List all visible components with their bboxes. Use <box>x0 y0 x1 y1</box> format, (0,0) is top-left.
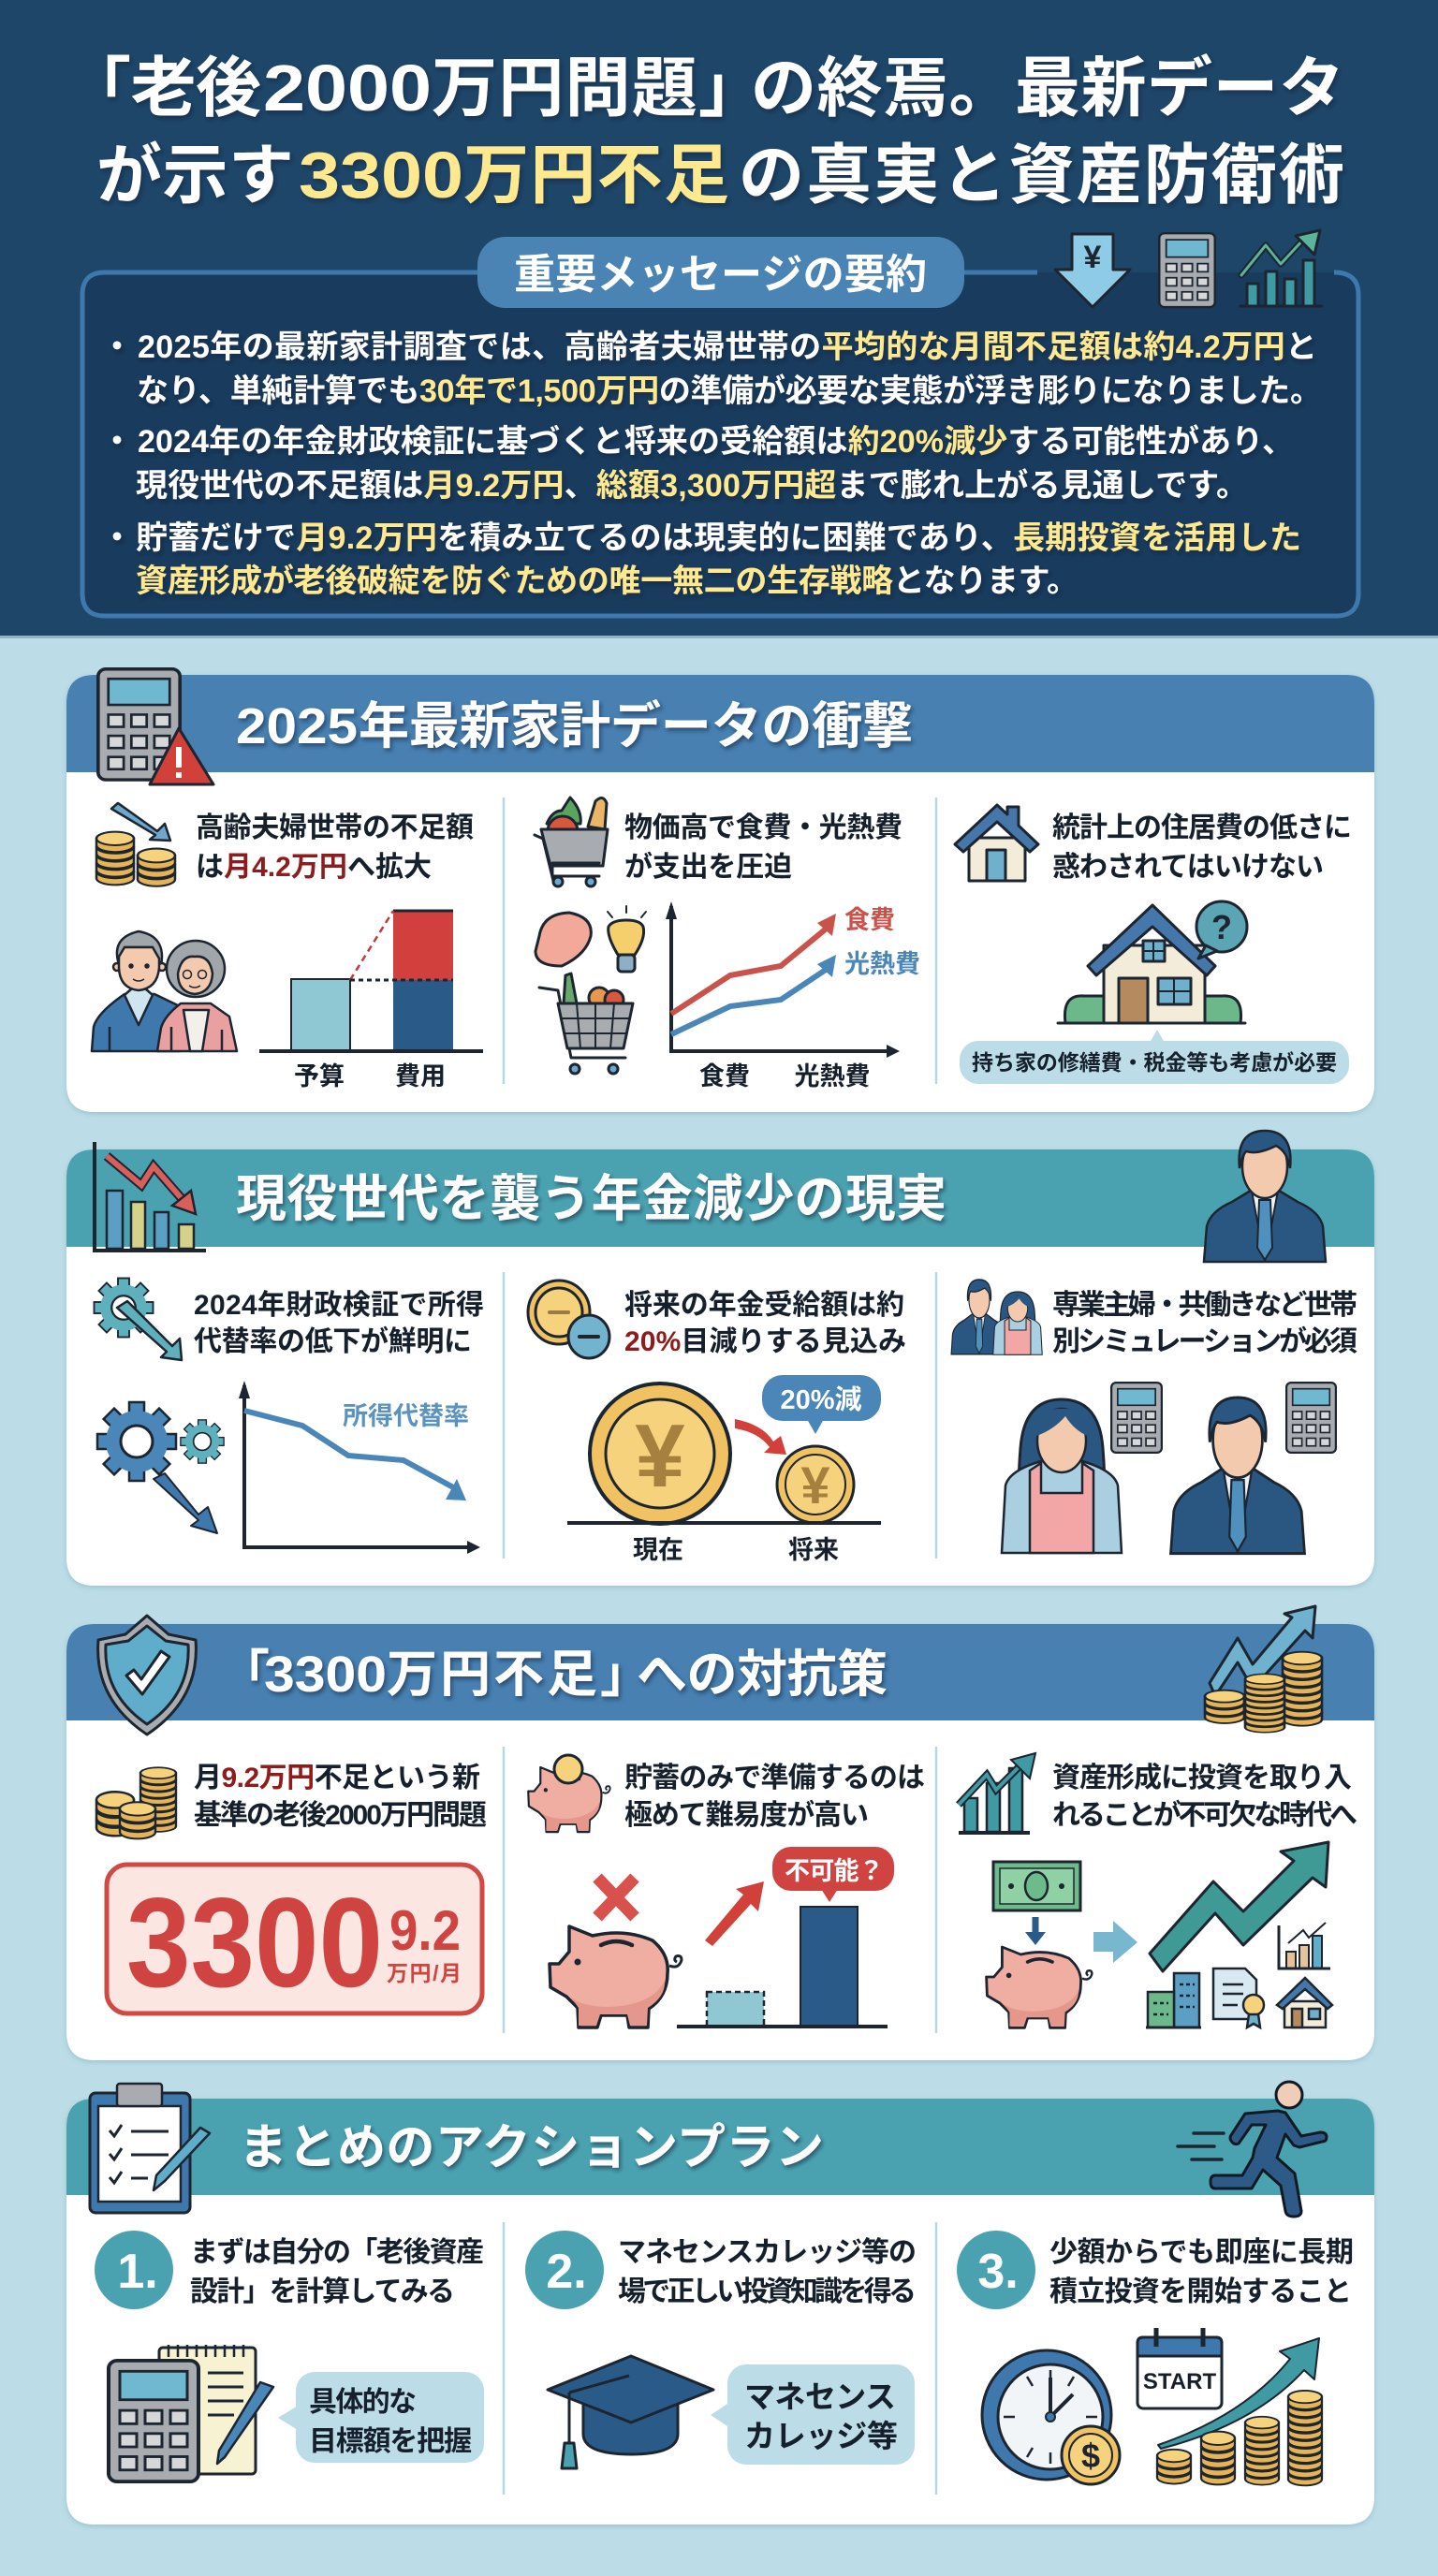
column: household simulation: 別シミュレーションが必須 <box>1052 1325 1357 1357</box>
icon: gears and down arrow <box>97 1402 224 1533</box>
column: savings difficulty: 極めて難易度が高い <box>624 1799 869 1831</box>
callout: 3300 figure: 9.2 <box>389 1899 461 1962</box>
column: investment <box>959 1753 1357 2027</box>
icon: housewife with calculator <box>1002 1383 1162 1553</box>
column: prices <box>535 798 920 1090</box>
icon: piggy with coin <box>528 1755 610 1832</box>
icon: meat <box>536 913 591 966</box>
text: まずは自分の「老後資産 <box>190 2237 484 2268</box>
line chart: food and utilities: 食費 <box>699 1062 750 1090</box>
header band <box>0 0 1438 638</box>
summary text: 資産形成が老後破綻を防ぐための唯一無二の生存戦略となります。 <box>136 563 1078 599</box>
arrow: up <box>705 1881 764 1946</box>
icon: falling bar chart <box>95 1142 206 1251</box>
line chart: food and utilities: 食費 <box>844 906 895 934</box>
callout: money sense college: カレッジ等 <box>744 2419 898 2453</box>
icon: shield <box>98 1616 196 1734</box>
icon: house <box>955 805 1038 881</box>
column: new standard <box>96 1763 487 2013</box>
callout: homeowner costs <box>960 1030 1349 1084</box>
icon: shopping cart <box>535 798 608 886</box>
heading: 現役世代を襲う年金減少の現実 <box>236 1171 946 1227</box>
icon: office worker with calculator <box>1170 1383 1336 1554</box>
icon: rising coin stacks <box>1157 2391 1322 2485</box>
text: 資産形成に投資を取り入 <box>1052 1763 1352 1793</box>
callout: 20% decrease <box>762 1375 881 1434</box>
column: 20% reduction <box>528 1281 906 1564</box>
arrow: reduction <box>735 1419 786 1455</box>
title: 万円不足 <box>463 139 729 212</box>
icon: start calendar: START <box>1143 2369 1216 2394</box>
column: housing <box>955 805 1352 1084</box>
callout: money sense college: マネセンス <box>744 2379 896 2414</box>
icon: start calendar <box>1137 2328 1222 2408</box>
callout: money sense college <box>711 2364 915 2465</box>
column: housing: 惑わされてはいけない <box>1052 852 1324 883</box>
column: step 2: 場で正しい投資知識を得る <box>618 2276 917 2307</box>
icon: cross <box>597 1878 635 1917</box>
column: replacement rate: 代替率の低下が鮮明に <box>194 1325 472 1357</box>
column: new standard: 基準の老後2000万円問題 <box>194 1800 487 1831</box>
icon: runner <box>1178 2082 1327 2217</box>
icon: businessman <box>1204 1131 1326 1262</box>
icon: growth chart <box>1240 230 1322 306</box>
arrow: growth <box>1150 1842 1328 1971</box>
icon: house with question: ? <box>1211 908 1232 946</box>
number badge 1 <box>95 2231 173 2309</box>
title: 「老後 <box>66 51 261 124</box>
line chart: replacement rate: 所得代替率 <box>343 1402 469 1430</box>
icon: growth chart <box>959 1753 1035 1833</box>
column: 20% reduction: 20%目減りする見込み <box>624 1326 906 1357</box>
heading: への対抗策 <box>637 1647 888 1703</box>
heading: 年最新家計データの衝撃 <box>359 698 913 754</box>
coins comparison: 現在 <box>633 1536 683 1564</box>
column: household simulation <box>951 1280 1357 1554</box>
summary text: なり、単純計算でも30年で1,500万円の準備が必要な実態が浮き彫りになりました。 <box>137 373 1322 409</box>
bar chart: budget vs expenses: 予算 <box>294 1062 345 1090</box>
line chart: food and utilities <box>666 901 920 1090</box>
arrow: growth curve <box>1158 2338 1319 2449</box>
icon: coin stacks <box>96 1767 176 1838</box>
panel header <box>66 1624 1374 1720</box>
column: step 2 <box>525 2231 917 2468</box>
icon: clock and coin <box>982 2350 1120 2484</box>
bar chart: budget vs expenses <box>259 911 483 1090</box>
column: step 3 <box>957 2231 1354 2485</box>
callout: 3300 figure: 3300 <box>126 1871 383 2013</box>
column: savings difficulty <box>528 1755 925 2027</box>
summary text: 2025年の最新家計調査では、高齢者夫婦世帯の平均的な月間不足額は約4.2万円と <box>138 329 1317 365</box>
callout: homeowner costs: 持ち家の修繕費・税金等も考慮が必要 <box>972 1050 1337 1075</box>
panel: 2025 household data <box>66 669 1374 1112</box>
line chart: food and utilities: 光熱費 <box>844 950 920 978</box>
line chart: replacement rate <box>239 1381 480 1554</box>
arrow: to growth <box>1093 1921 1137 1963</box>
title: 3300 <box>299 139 463 212</box>
summary text: ・ <box>101 520 133 556</box>
summary text: ・ <box>101 424 133 460</box>
icon: clipboard checklist <box>90 2084 210 2213</box>
icon: elderly couple <box>92 931 237 1051</box>
number badge 2 <box>525 2231 604 2309</box>
callout: impossible: 不可能？ <box>785 1857 884 1885</box>
icon: yen down arrow <box>1055 234 1130 307</box>
coins comparison <box>567 1375 881 1564</box>
icon: coin and minus <box>528 1281 609 1358</box>
heading: 「 <box>219 1647 270 1703</box>
icon: yen down arrow: ¥ <box>1084 240 1102 275</box>
heading <box>219 1647 888 1703</box>
coins comparison: 将来 <box>788 1536 839 1564</box>
icon: gear and arrow <box>94 1279 182 1360</box>
icon: calculator <box>1159 233 1215 307</box>
coins comparison: ¥ <box>800 1456 830 1515</box>
icon: clock and coin: $ <box>1081 2437 1100 2475</box>
panel header <box>66 2099 1374 2195</box>
summary text <box>101 329 1322 599</box>
column: step 3: 積立投資を開始すること <box>1049 2276 1352 2307</box>
number badge 1: 1. <box>117 2245 158 2299</box>
heading: 万円不足」 <box>387 1647 651 1703</box>
bar chart: budget vs expenses: 費用 <box>395 1062 446 1090</box>
icon: asset classes <box>1146 1923 1332 2027</box>
panel: key message summary <box>82 237 1358 616</box>
column: prices: が支出を圧迫 <box>624 851 792 883</box>
text: 統計上の住居費の低さに <box>1052 812 1352 843</box>
callout: target amount: 目標額を把握 <box>309 2426 472 2457</box>
column: replacement rate <box>94 1279 484 1554</box>
column: investment: れることが不可欠な時代へ <box>1052 1799 1357 1831</box>
text: 2024年財政検証で所得 <box>194 1290 484 1321</box>
callout: 20% decrease: 20%減 <box>780 1384 862 1415</box>
title: の真実と資産防衛術 <box>739 139 1344 212</box>
text: 少額からでも即座に長期 <box>1049 2237 1354 2268</box>
icon: calculator and notepad <box>109 2345 273 2481</box>
coins comparison: ¥ <box>635 1406 685 1506</box>
text: 高齢夫婦世帯の不足額 <box>196 812 474 843</box>
bar chart: savings gap <box>677 1907 888 2027</box>
column: shortfall: は月4.2万円へ拡大 <box>196 852 432 883</box>
callout: 3300 figure: 万円/月 <box>387 1961 462 1985</box>
column: shortfall <box>92 803 483 1090</box>
summary text: 貯蓄だけで月9.2万円を積み立てるのは現実的に困難であり、長期投資を活用した <box>136 520 1301 556</box>
icon: coins with rising arrow <box>1205 1606 1322 1733</box>
summary text: ・ <box>101 329 133 365</box>
icon: calculator with warning <box>98 669 213 784</box>
icon: house with question <box>1058 901 1247 1023</box>
callout: target amount: 具体的な <box>309 2387 417 2418</box>
icon: couple <box>951 1280 1042 1354</box>
number badge 2: 2. <box>546 2245 587 2299</box>
panel header <box>66 675 1374 772</box>
text: 専業主婦・共働きなど世帯 <box>1052 1290 1357 1321</box>
callout: target amount <box>278 2372 484 2463</box>
heading: 3300 <box>264 1647 387 1703</box>
icon: coins and down arrow <box>96 803 175 886</box>
panel header <box>66 1149 1374 1247</box>
icon: piggy bank <box>550 1926 682 2027</box>
number badge 3: 3. <box>977 2245 1019 2299</box>
heading: まとめのアクションプラン <box>239 2121 824 2175</box>
title: 万円問題」 <box>432 51 764 124</box>
title: の終焉。最新データ <box>751 51 1344 124</box>
summary text: 2024年の年金財政検証に基づくと将来の受給額は約20%減少する可能性があり、 <box>138 423 1294 460</box>
panel: action plan <box>66 2082 1374 2525</box>
text: 月9.2万円不足という新 <box>194 1763 480 1793</box>
icon: grocery cart <box>539 973 633 1074</box>
heading: 2025 <box>236 698 358 754</box>
title <box>66 51 1344 212</box>
icon: graduation cap <box>548 2356 713 2468</box>
icon: bill to piggy <box>987 1862 1092 2027</box>
icon: light bulb <box>608 906 646 972</box>
column: step 1: 設計」を計算してみる <box>190 2276 455 2307</box>
summary text: 現役世代の不足額は月9.2万円、総額3,300万円超まで膨れ上がる見通しです。 <box>136 467 1248 504</box>
text: 将来の年金受給額は約 <box>624 1290 904 1321</box>
panel: pension reduction <box>66 1131 1374 1586</box>
summary heading pill: 重要メッセージの要約 <box>514 252 927 298</box>
text: 物価高で食費・光熱費 <box>624 812 902 843</box>
title: が示す <box>96 139 294 212</box>
column: step 1 <box>95 2231 484 2481</box>
title: 2000 <box>263 51 432 124</box>
number badge 3 <box>957 2231 1035 2309</box>
summary heading pill <box>477 237 964 308</box>
callout: impossible <box>772 1847 894 1902</box>
panel: countermeasures <box>66 1606 1374 2060</box>
text: 貯蓄のみで準備するのは <box>624 1763 925 1793</box>
line chart: food and utilities: 光熱費 <box>794 1062 871 1090</box>
text: マネセンスカレッジ等の <box>618 2237 917 2268</box>
